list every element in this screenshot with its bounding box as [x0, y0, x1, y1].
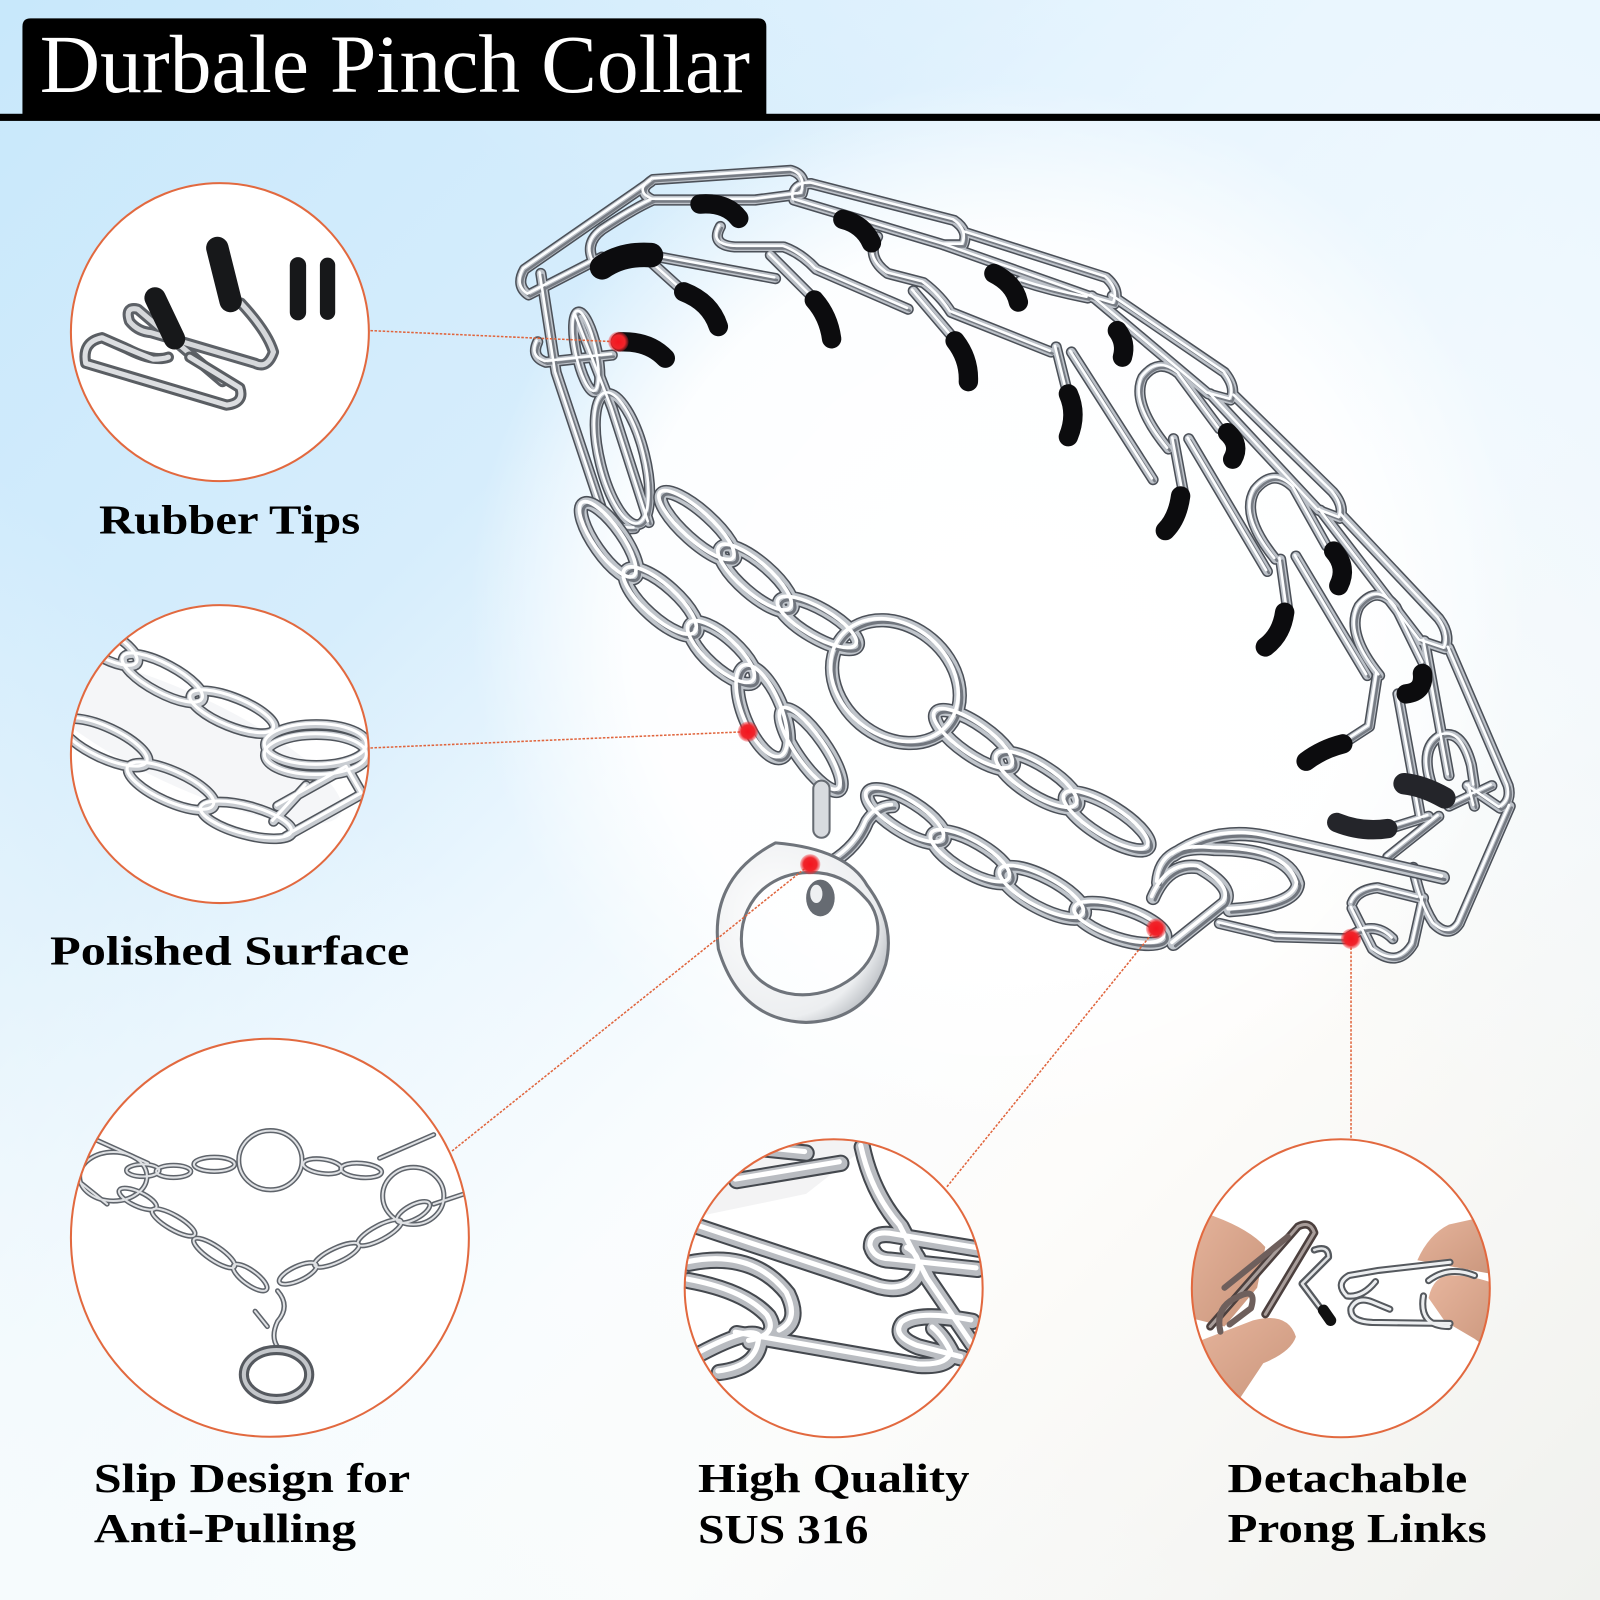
- circle border: [1192, 1139, 1490, 1437]
- icon: prongs with rubber tips: [85, 248, 328, 405]
- panel: high quality steel: [684, 1138, 984, 1437]
- leader lines from circles to collar: [370, 331, 1351, 1187]
- hands detaching prong link: [1192, 1216, 1489, 1398]
- pendant D-ring: [717, 781, 888, 1022]
- label: high quality sus 316: High Quality: [698, 1456, 969, 1501]
- circle border: [71, 1039, 469, 1437]
- label: detachable prong links: Prong Links: [1228, 1506, 1487, 1551]
- collar prong links and outer rail: [520, 169, 1512, 960]
- steel link close-up: [684, 1138, 984, 1372]
- panel: detachable prong links: [1184, 1139, 1500, 1437]
- collar chain links and rings: [570, 482, 1445, 955]
- circle border: [71, 605, 369, 903]
- label: high quality sus 316: SUS 316: [698, 1507, 868, 1552]
- panel: rubber tips: [71, 183, 369, 481]
- title text: Durbale Pinch Collar: [40, 18, 750, 110]
- label: slip design for anti-pulling: Anti-Pulling: [94, 1506, 356, 1551]
- label: slip design for anti-pulling: Slip Design for: [94, 1456, 410, 1501]
- panel: slip design: [71, 1039, 469, 1437]
- rubber prong tips: [602, 204, 1445, 830]
- red hotspot dots: [608, 332, 1361, 949]
- miniature slip chain: [80, 1131, 464, 1399]
- label: detachable prong links: [1228, 1456, 1487, 1551]
- label: polished surface: Polished Surface: [50, 928, 409, 973]
- circle border: [685, 1139, 983, 1437]
- label: detachable prong links: Detachable: [1228, 1456, 1467, 1501]
- label: slip design for anti-pulling: [94, 1456, 410, 1551]
- label: high quality sus 316: [698, 1456, 969, 1552]
- title banner: [0, 18, 1600, 121]
- panel: polished surface: [70, 604, 370, 904]
- main product: pinch collar: [520, 169, 1512, 1022]
- circle border: [71, 183, 369, 481]
- label: rubber tips: Rubber Tips: [99, 498, 360, 543]
- chain close-up: [72, 638, 368, 844]
